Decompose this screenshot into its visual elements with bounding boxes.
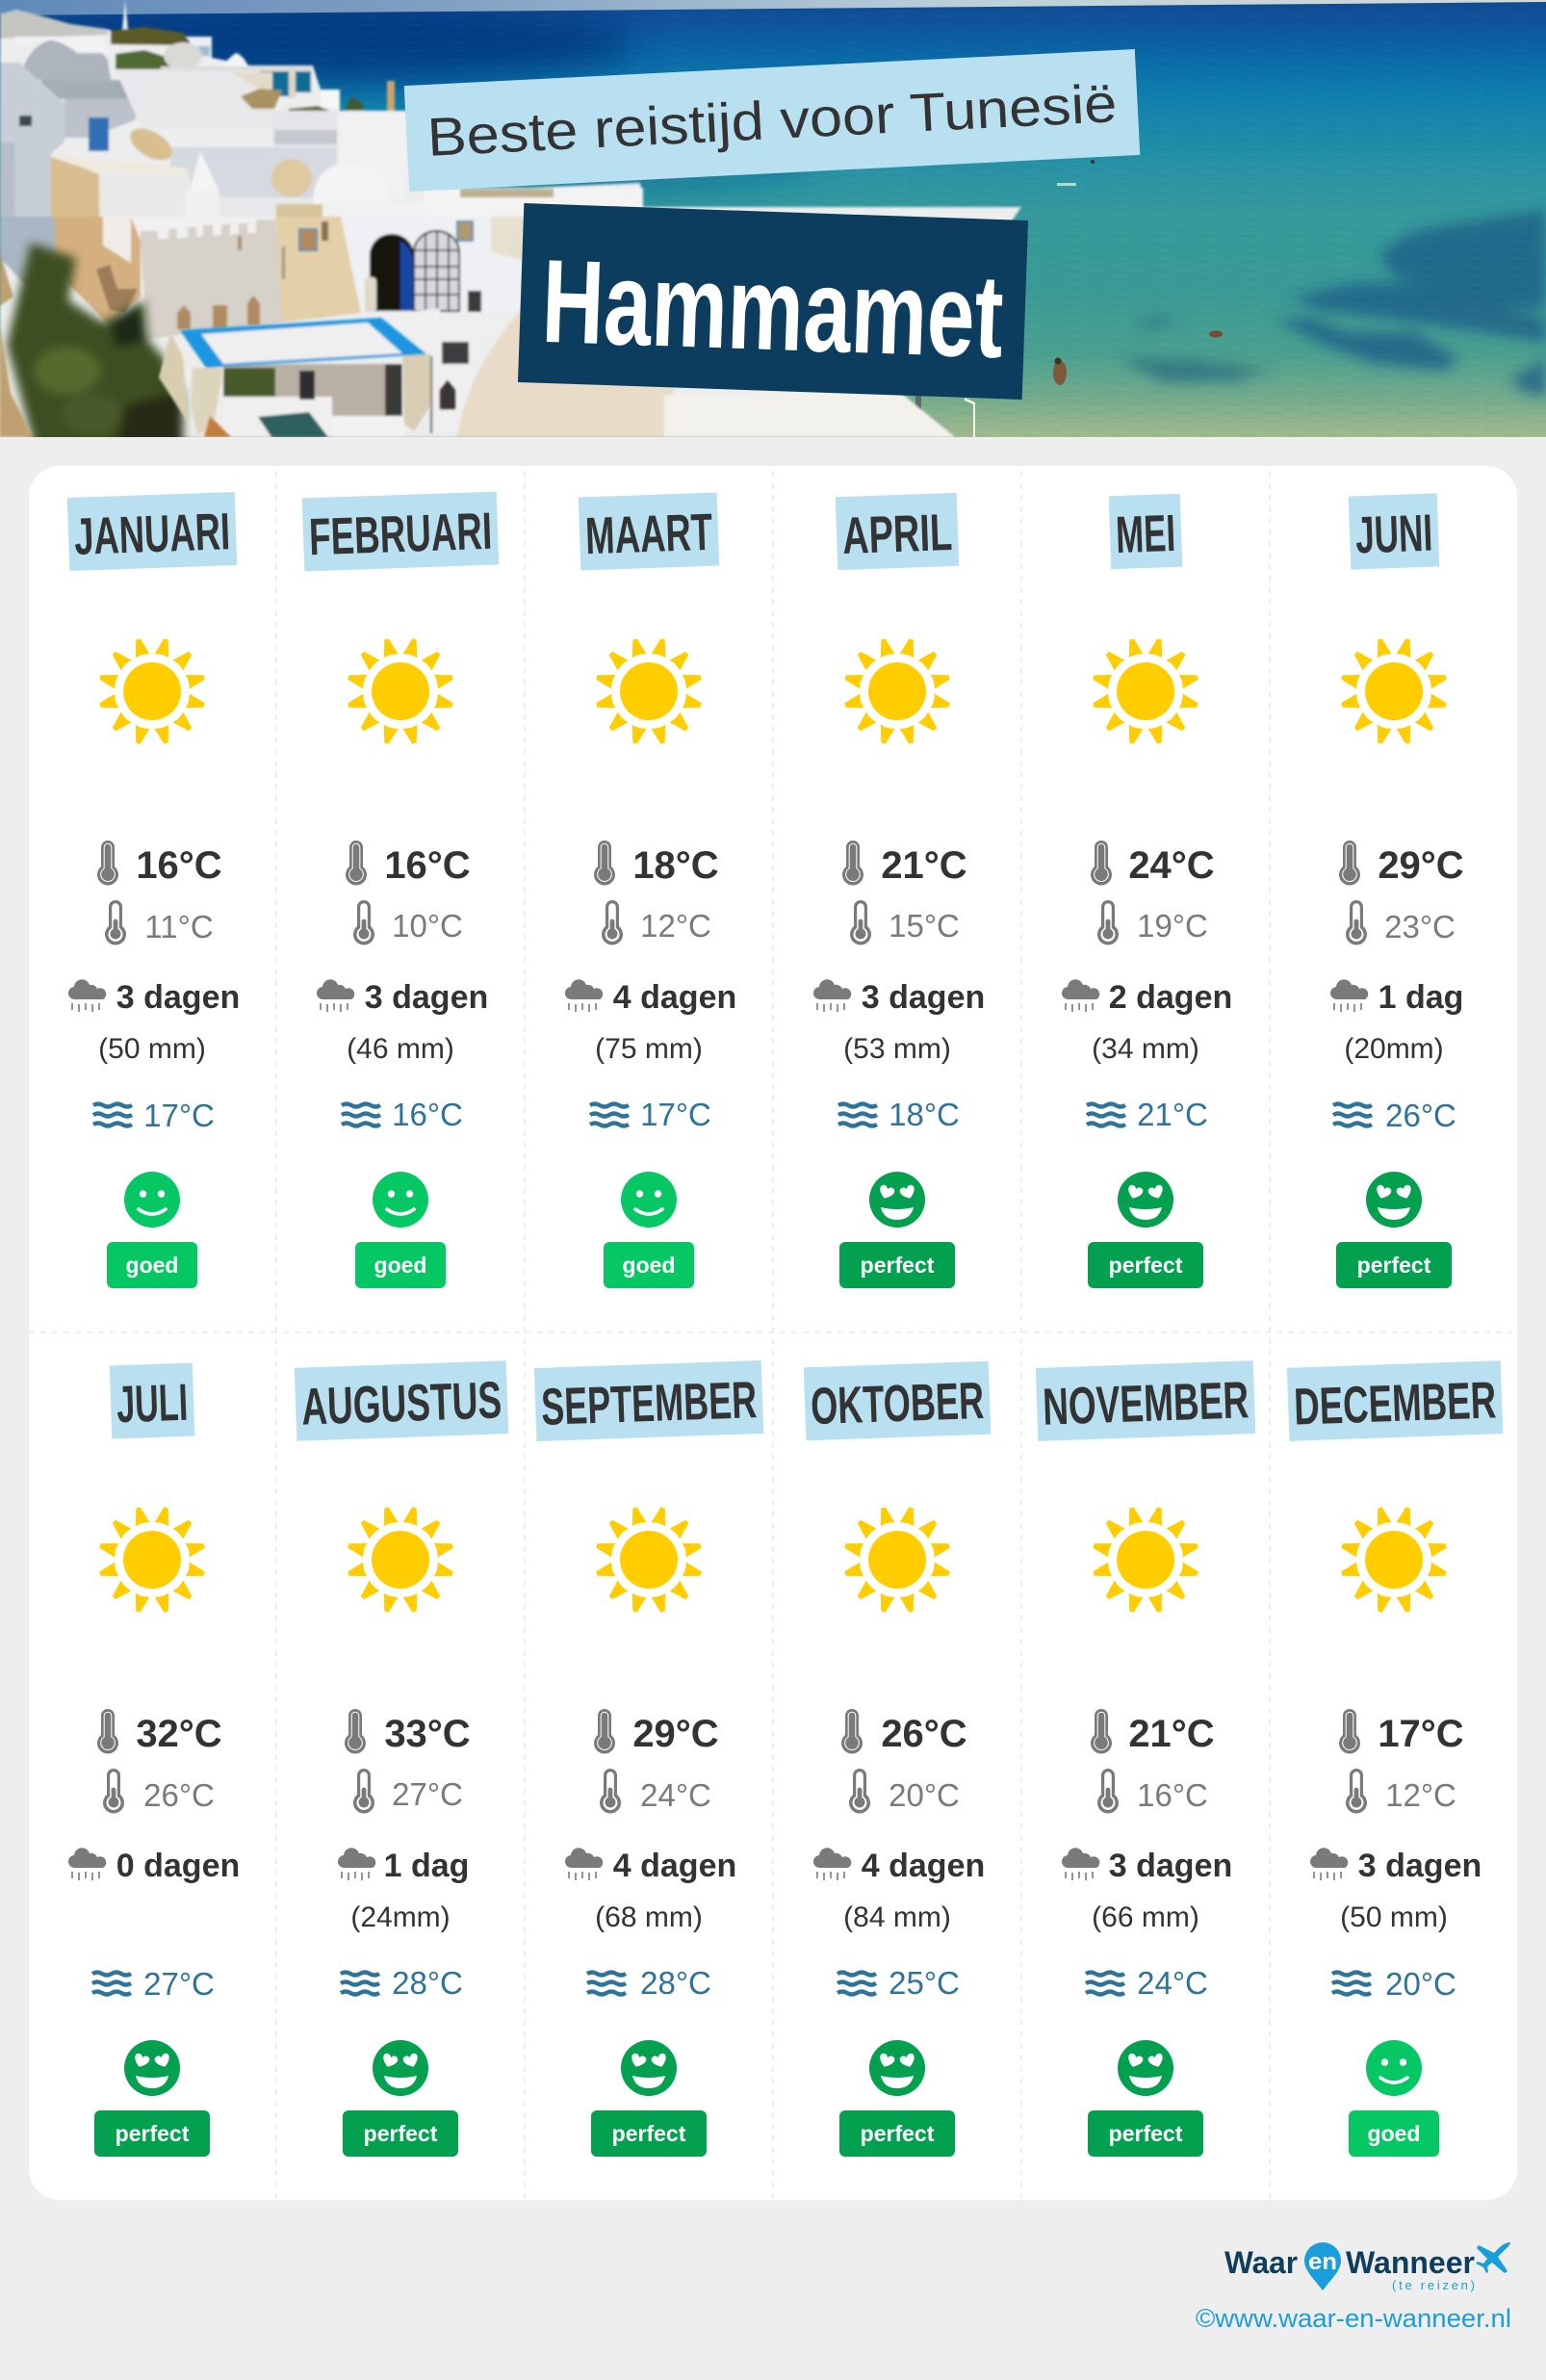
rain days: 3 dagen [1109,1848,1232,1884]
badge: perfect [343,2110,458,2157]
max temperature: 33°C [384,1713,471,1755]
badge: perfect: perfect [861,1253,935,1278]
badge: goed [355,1242,446,1288]
badge: perfect: perfect [1357,1253,1431,1278]
icon: thermometer high [97,1709,118,1753]
badge: perfect [1336,1242,1452,1288]
month: februari [302,491,499,1288]
max temperature: 32°C [136,1713,222,1755]
icon: waves [92,1972,131,1995]
icon: thermometer low [1097,1769,1119,1813]
badge: perfect: perfect [1109,2121,1183,2146]
heading: november [1036,1360,1255,1441]
icon: waves [1332,1972,1371,1995]
min temperature: 10°C [392,908,463,944]
max temperature: 16°C [384,844,471,887]
icon: waves [1087,1103,1125,1126]
icon: sun [595,637,703,745]
max temperature: 17°C [1378,1713,1464,1755]
icon: thermometer high [97,841,118,885]
rain days: 4 dagen [862,1848,985,1884]
heading: november: NOVEMBER [1042,1371,1250,1436]
icon: rain cloud [68,1848,106,1880]
rainfall: (68 mm) [595,1901,703,1933]
max temperature: 21°C [1128,1713,1215,1755]
rainfall: (66 mm) [1092,1901,1199,1933]
rain days: 3 dagen [1358,1848,1482,1884]
icon: waves [342,1103,380,1126]
heading: maart [579,493,719,570]
logo wordmark left: Waar [1224,2245,1298,2280]
icon: smiley perfect [869,1172,925,1228]
rainfall: (50 mm) [98,1033,206,1065]
icon: waves [587,1972,626,1995]
icon: rain cloud [1062,979,1099,1012]
icon: location pin: en [1308,2249,1337,2275]
rain days: 4 dagen [613,979,736,1016]
city banner [518,203,1028,400]
icon: sun [347,1506,454,1614]
panel: monthly climate table [29,466,1517,2200]
icon: smiley good [373,1172,428,1228]
icon: smiley perfect [124,2040,180,2096]
logo tagline: (te reizen) [1392,2278,1475,2292]
icon: smiley perfect [1118,1172,1173,1228]
icon: rain cloud [565,979,603,1012]
icon: thermometer low [600,1769,621,1813]
icon: smiley perfect [869,2040,925,2096]
title banner [404,49,1140,192]
heading: februari [302,491,499,572]
icon: thermometer low [103,1769,124,1813]
sea temperature: 16°C [392,1097,463,1132]
min temperature: 19°C [1137,908,1208,944]
rainfall: (53 mm) [843,1033,951,1065]
icon: sun [1340,637,1448,745]
icon: sun [1340,1506,1448,1614]
badge: goed: goed [126,1253,178,1278]
month: juni [1330,493,1464,1288]
max temperature: 21°C [881,844,967,887]
rain days: 4 dagen [613,1848,736,1884]
icon: rain cloud [813,1848,851,1880]
icon: smiley perfect [373,2040,428,2096]
sea temperature: 28°C [640,1965,711,2001]
month: april [813,493,985,1288]
heading: maart: MAART [584,504,713,565]
max temperature: 26°C [881,1713,967,1755]
icon: sun [843,1506,951,1614]
month: december [1287,1360,1503,2157]
heading: juni: JUNI [1354,504,1433,564]
icon: sun [595,1506,703,1614]
icon: waves [1086,1972,1124,1995]
icon: smiley perfect [621,2040,677,2096]
icon: sun [1092,637,1199,745]
buildings [0,0,1021,438]
icon: sun [347,637,454,745]
icon: waves [93,1103,132,1126]
icon: thermometer high [842,841,863,885]
icon: sun [843,637,951,745]
sea temperature: 26°C [1385,1098,1456,1133]
badge: goed: goed [1368,2121,1420,2146]
sea temperature: 27°C [143,1966,215,2002]
min temperature: 12°C [1385,1777,1456,1813]
icon: smiley good [1366,2040,1422,2096]
badge: goed: goed [623,1253,675,1278]
icon: rain cloud [813,979,851,1012]
icon: rain cloud [565,1848,603,1880]
rain days: 1 dag [384,1848,469,1884]
heading: april: APRIL [841,504,953,565]
icon: waves [838,1103,877,1126]
rainfall: (84 mm) [843,1901,951,1933]
min temperature: 12°C [640,908,711,944]
min temperature: 11°C [144,909,214,944]
logo: Waar en Wanneer [1196,2242,1511,2333]
city banner: Hammamet [540,236,1005,383]
rainfall: (46 mm) [347,1033,454,1065]
heading: juli [110,1363,194,1438]
icon: smiley perfect [1118,2040,1173,2096]
month: mei [1062,494,1232,1288]
min temperature: 24°C [640,1777,711,1813]
icon: thermometer low [850,900,871,944]
heading: juni [1349,493,1439,570]
icon: thermometer low [1346,1769,1367,1813]
month: juli [68,1363,240,2157]
rainfall: (50 mm) [1340,1901,1448,1933]
month: maart [565,493,736,1288]
icon: thermometer high [1091,841,1112,885]
min temperature: 23°C [1384,909,1456,944]
sea temperature: 17°C [640,1097,711,1132]
foliage [7,243,183,448]
month: november [1036,1360,1255,2157]
max temperature: 16°C [136,844,222,887]
sea temperature: 21°C [1137,1097,1208,1132]
heading: oktober: OKTOBER [810,1372,985,1436]
rain days: 3 dagen [365,979,488,1016]
month: oktober [804,1361,991,2157]
heading: mei: MEI [1115,504,1176,564]
icon: smiley good [621,1172,677,1228]
rain days: 3 dagen [862,979,985,1016]
sea temperature: 20°C [1385,1966,1456,2002]
icon: rain cloud [1062,1848,1099,1880]
rainfall: (24mm) [350,1901,451,1933]
icon: thermometer high [841,1709,863,1753]
badge: perfect: perfect [364,2121,438,2146]
heading: juli: JULI [116,1374,189,1434]
rain days: 3 dagen [116,979,240,1016]
min temperature: 27°C [392,1776,463,1812]
rainfall: (34 mm) [1092,1033,1199,1065]
icon: thermometer low [849,1769,870,1813]
icon: thermometer high [594,1709,615,1753]
badge: perfect: perfect [861,2121,935,2146]
icon: thermometer high [1091,1709,1112,1753]
month: augustus [295,1360,508,2157]
badge: goed [1349,2110,1439,2157]
heading: april [836,493,959,570]
max temperature: 29°C [1378,844,1464,887]
sea temperature: 28°C [392,1965,463,2001]
icon: rain cloud [1330,979,1368,1012]
logo wordmark right: Wanneer [1346,2245,1475,2280]
sea temperature: 25°C [889,1965,960,2001]
icon: plane [1476,2242,1510,2273]
month: januari [67,492,240,1288]
rainfall: (20mm) [1344,1033,1444,1065]
icon: waves [837,1972,876,1995]
icon: thermometer low [602,900,623,944]
sea temperature: 17°C [143,1098,215,1133]
min temperature: 20°C [889,1777,960,1813]
icon: thermometer high [594,841,615,885]
rain days: 2 dagen [1109,979,1232,1016]
icon: waves [1333,1103,1372,1126]
sea temperature: 24°C [1137,1965,1208,2001]
icon: location pin [1304,2242,1341,2290]
icon: rain cloud [317,979,354,1012]
heading: september: SEPTEMBER [540,1371,758,1436]
icon: smiley perfect [1366,1172,1422,1228]
badge: perfect [839,2110,955,2157]
max temperature: 29°C [632,1713,719,1755]
icon: sun [1092,1506,1199,1614]
copyright url: ©www.waar-en-wanneer.nl [1196,2304,1511,2333]
icon: sun [98,637,206,745]
rain days: 0 dagen [116,1848,240,1884]
icon: smiley good [124,1172,180,1228]
icon: thermometer high [1339,1709,1360,1753]
month: september [534,1360,763,2157]
icon: sun [98,1506,206,1614]
badge: perfect [94,2110,210,2157]
badge: goed: goed [374,1253,426,1278]
badge: perfect [839,1242,955,1288]
max temperature: 18°C [632,844,719,887]
heading: januari [67,492,237,571]
badge: perfect: perfect [1109,1253,1183,1278]
foreground details [0,318,455,437]
badge: perfect [591,2110,707,2157]
heading: januari: JANUARI [73,503,231,566]
heading: oktober [804,1361,991,1440]
header photo: Hammamet coast [0,0,1546,448]
heading: augustus [295,1360,508,1441]
icon: thermometer high [1339,841,1360,885]
icon: thermometer low [353,1769,374,1813]
icon: rain cloud [338,1848,375,1880]
icon: thermometer high [346,841,367,885]
badge: perfect: perfect [612,2121,686,2146]
rainfall: (75 mm) [595,1033,703,1065]
icon: rain cloud [1310,1848,1348,1880]
badge: perfect [1088,1242,1203,1288]
heading: augustus: AUGUSTUS [300,1371,502,1436]
min temperature: 15°C [889,908,960,944]
min temperature: 26°C [143,1777,215,1813]
min temperature: 16°C [1137,1777,1208,1813]
icon: thermometer low [1097,900,1119,944]
icon: thermometer low [105,900,126,944]
icon: thermometer low [1346,900,1367,944]
heading: september [534,1360,763,1441]
rain days: 1 dag [1379,979,1463,1016]
badge: perfect [1088,2110,1203,2157]
badge: goed [107,1242,197,1288]
icon: waves [590,1103,629,1126]
heading: mei [1109,494,1182,569]
icon: thermometer low [353,900,374,944]
badge: goed [604,1242,694,1288]
icon: waves [341,1972,379,1995]
heading: februari: FEBRUARI [308,503,493,566]
max temperature: 24°C [1128,844,1215,887]
icon: rain cloud [68,979,106,1012]
icon: thermometer high [345,1709,366,1753]
sea temperature: 18°C [889,1097,960,1132]
badge: perfect: perfect [116,2121,190,2146]
title banner: Beste reistijd voor Tunesië [425,72,1119,168]
